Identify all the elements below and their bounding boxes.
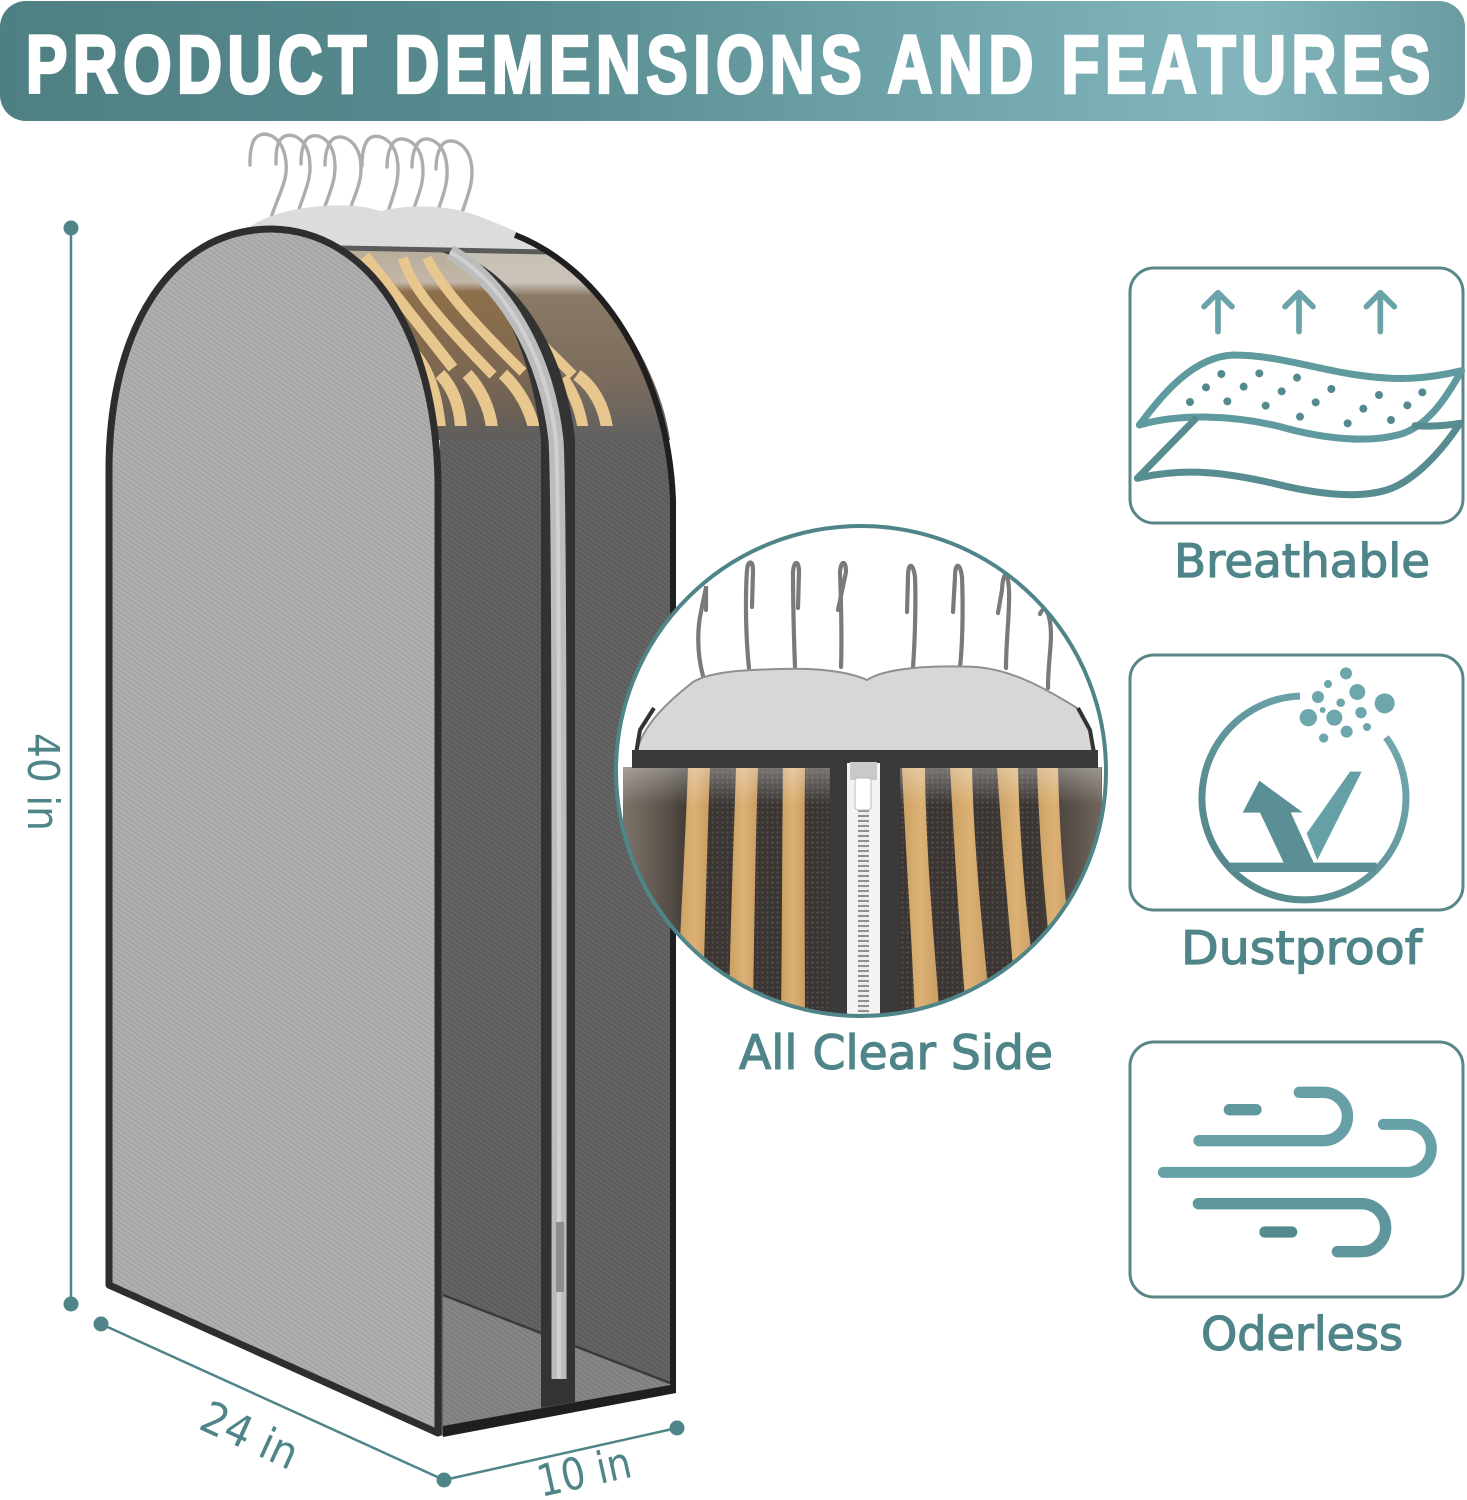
clear window right: [450, 252, 670, 440]
panel: oderless icon: [1130, 1042, 1463, 1297]
close-up black binding: [632, 750, 1098, 768]
close-up bag edges: [634, 706, 1096, 750]
back floor edge: [443, 1295, 670, 1383]
dimension: depth 10 in: [444, 1420, 684, 1500]
close-up clear window base: [704, 768, 1040, 1012]
close-up contents: [623, 562, 1102, 1027]
dimension: height 40 in: 40 in: [17, 733, 68, 831]
wooden hangers in the window: [365, 256, 607, 428]
close-up left clear side: [623, 767, 688, 933]
icon: dust circle with check mark: [1202, 667, 1406, 900]
icon: hanger hooks above the bag: [250, 134, 472, 224]
top binding strip: [340, 248, 550, 252]
close-up hooks: [698, 562, 1051, 688]
dimension: width 24 in: 24 in: [192, 1392, 306, 1480]
panel: close-up circle: [616, 526, 1106, 1027]
zipper band: [442, 252, 575, 1408]
panel: breathable icon: [1130, 268, 1463, 523]
zipper slider: [556, 1222, 564, 1292]
close-up zipper pull: [855, 778, 871, 810]
close-up zipper teeth: [858, 808, 869, 1023]
title banner: PRODUCT DEMENSIONS AND FEATURES: [26, 19, 1430, 111]
hanger shoulder cover: [248, 205, 552, 251]
dimension: width 24 in: [94, 1316, 452, 1488]
close-up wooden slats: [678, 767, 1072, 1020]
close-up zipper band: [830, 763, 900, 1025]
dimension: height 40 in: [17, 220, 78, 1312]
icon: wind lines: [1163, 1092, 1431, 1252]
close-up right clear side: [1042, 767, 1102, 933]
close-up white zipper: [847, 763, 880, 1025]
label: Dustproof: Dustproof: [1181, 921, 1424, 975]
zipper highlight: [450, 252, 559, 1379]
panel: garment bag: [109, 205, 676, 1437]
label: Breathable: Breathable: [1174, 534, 1430, 588]
panel: dustproof icon: [1130, 655, 1463, 910]
front panel: [109, 229, 438, 1433]
clear window left: [340, 250, 556, 440]
bag side panel: [340, 236, 673, 1436]
outer arc and right edge: [515, 235, 673, 1392]
label: Oderless: Oderless: [1201, 1307, 1403, 1361]
zipper teeth: [450, 252, 559, 1379]
close-up zipper top: [850, 762, 877, 780]
icon: breathable fabric layers and arrows: [1137, 293, 1462, 495]
floor of the bag: [443, 1295, 672, 1432]
label: All Clear Side: All Clear Side: [739, 1026, 1053, 1081]
bottom binding strip: [443, 1384, 676, 1437]
close-up top light fade: [623, 767, 1101, 800]
close-up shoulder cushion: [637, 666, 1095, 752]
